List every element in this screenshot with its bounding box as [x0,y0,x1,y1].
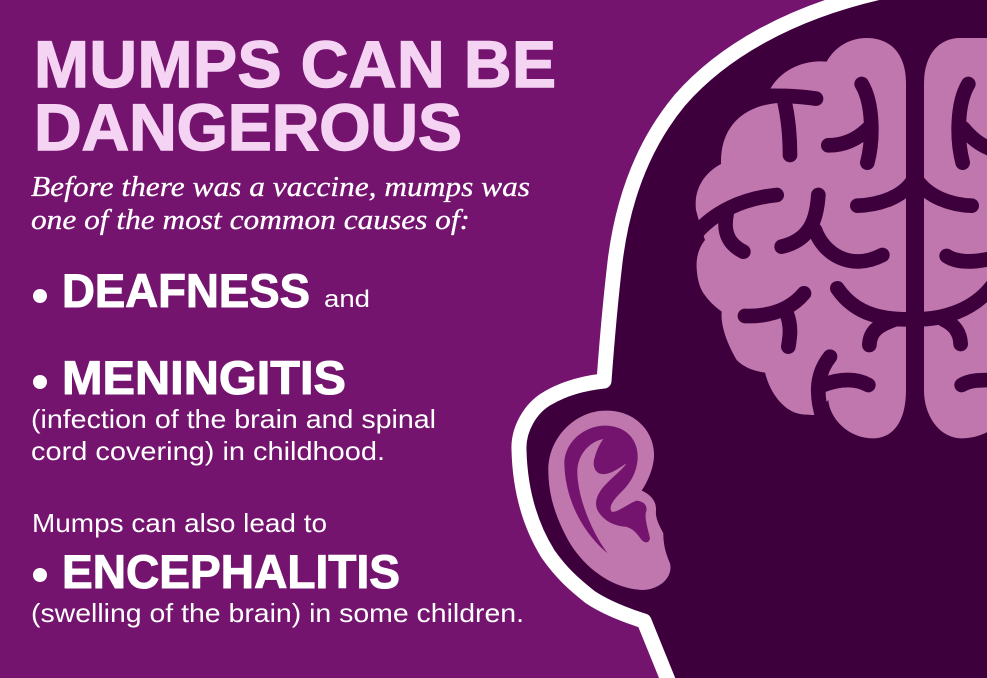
title: DANGEROUS [34,90,462,164]
text: mumps can also lead to: Mumps can also lead to [32,508,327,538]
subtitle: one of the most common causes of: [31,204,470,236]
subtitle [31,171,530,236]
list item: encephalitis: (swelling of the brain) in some children. [31,598,524,628]
title: MUMPS CAN BE [34,27,556,101]
list item: encephalitis: ENCEPHALITIS [62,545,400,598]
right hemisphere [924,38,987,438]
left hemisphere [696,38,906,438]
list item: meningitis: MENINGITIS [62,351,346,404]
subtitle: Before there was a vaccine, mumps was [31,171,530,203]
icon: ear [548,411,671,590]
list item: encephalitis [31,545,524,628]
list item: meningitis: (infection of the brain and spinal [31,404,436,434]
head silhouette [519,0,987,678]
list item: deafness: and [324,286,370,313]
list item: meningitis [31,351,436,466]
title [34,27,556,164]
brain fissures [693,40,987,438]
list item: meningitis: cord covering) in childhood. [31,436,385,466]
list item: deafness: DEAFNESS [62,264,310,317]
brain [693,38,987,438]
